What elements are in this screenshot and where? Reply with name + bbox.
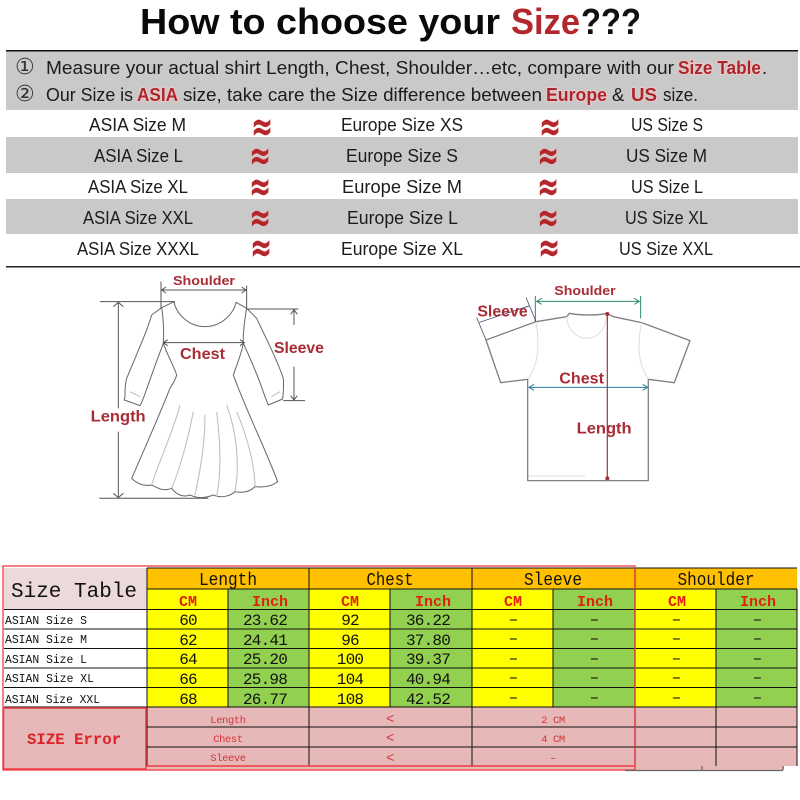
unit headers: Inch (577, 594, 613, 611)
measurements row M: – (509, 630, 518, 648)
conversion row XXXL: Europe Size XL (341, 238, 463, 259)
conversion row XXL: US Size XL (625, 207, 708, 228)
measurements row XXL: 108 (337, 691, 363, 709)
conversion row XL: ASIA Size XL (88, 176, 188, 197)
unit headers: CM (341, 594, 359, 611)
instruction 2: ② (15, 82, 35, 107)
instruction 2: Europe (546, 84, 607, 105)
measurements row L: – (672, 650, 681, 668)
measurements row M: 96 (341, 632, 359, 650)
size error rows: < (386, 712, 394, 728)
size labels: ASIAN Size XL (5, 672, 94, 686)
table grid (4, 568, 797, 766)
conversion row M: ≈ (539, 104, 561, 150)
measurements row M: 24.41 (243, 632, 287, 650)
conversion row XL: ≈ (249, 164, 271, 210)
measurements row M: – (753, 630, 762, 648)
instruction 2: size, take care the Size difference between (183, 84, 542, 105)
unit headers: Inch (252, 594, 288, 611)
size labels: ASIAN Size XXL (5, 693, 100, 707)
unit headers (179, 594, 776, 611)
conversion row XXL: Europe Size L (347, 207, 458, 228)
instruction 1: . (762, 57, 767, 78)
measurements row M: 62 (179, 632, 197, 650)
conversion row M: Europe Size XS (341, 114, 463, 135)
instruction 1: ① (15, 55, 35, 80)
heading: size table: Size Table (11, 581, 137, 604)
measurements row L: 100 (337, 651, 363, 669)
measurements row S: 60 (179, 612, 197, 630)
unit headers: Inch (415, 594, 451, 611)
measurements row XL (179, 669, 762, 689)
measurements row XXL (179, 689, 762, 709)
size error rows: 2 CM (541, 715, 565, 727)
dress label: shoulder: Shoulder (173, 274, 235, 288)
size error rows: < (386, 751, 394, 767)
conversion row XL (88, 164, 703, 210)
measurements row XXL: – (509, 689, 518, 707)
instruction 2: & (612, 84, 625, 105)
t-shirt sleeve marker (477, 297, 536, 340)
measurements row XXL: 42.52 (406, 691, 450, 709)
column headers: Sleeve (524, 571, 582, 591)
unit headers: CM (668, 594, 686, 611)
table cell fills (4, 568, 797, 770)
conversion row XXXL: ≈ (538, 225, 560, 271)
measurements row S: – (590, 611, 599, 629)
conversion row M: ASIA Size M (89, 114, 186, 135)
icon: t-shirt outline (486, 313, 690, 481)
measurements row S: – (672, 611, 681, 629)
instruction 1: Measure your actual shirt Length, Chest, Shoulder…etc, compare with our (46, 57, 674, 78)
unit headers: CM (504, 594, 522, 611)
conversion row XXXL (77, 225, 713, 271)
conversion row L (94, 133, 707, 179)
size error rows: < (386, 731, 394, 747)
measurements row S (179, 611, 762, 630)
instruction 1: Size Table (678, 57, 761, 78)
t-shirt label: shoulder: Shoulder (554, 284, 616, 298)
size error rows: Chest (213, 734, 243, 746)
measurements row XXL: 26.77 (243, 691, 287, 709)
measurements row S: – (753, 611, 762, 629)
dress label: length: Length (91, 409, 146, 426)
conversion row XL: US Size L (631, 176, 703, 197)
title: Size (511, 1, 580, 42)
column headers: Chest (366, 571, 414, 591)
conversion row L: ≈ (249, 133, 271, 179)
conversion row XXL: ASIA Size XXL (83, 207, 193, 228)
diagram: dress measurements (91, 274, 324, 498)
measurements row M: – (672, 630, 681, 648)
measurements row XL: 40.94 (406, 671, 450, 689)
measurements row S: – (509, 611, 518, 629)
title (140, 1, 641, 42)
size error rows: Sleeve (210, 753, 246, 765)
measurements row L: – (509, 650, 518, 668)
icon: dress outline (124, 302, 284, 497)
size error rows: 4 CM (541, 734, 565, 746)
instruction 2: US (631, 84, 657, 105)
t-shirt label: length: Length (577, 420, 632, 437)
measurements row XXL: 68 (179, 691, 197, 709)
measurements row S: 36.22 (406, 612, 450, 630)
size labels: ASIAN Size S (5, 614, 87, 628)
column headers: Length (199, 571, 257, 591)
size error rows: Length (210, 715, 246, 727)
measurements row M (179, 630, 762, 650)
size error rows: – (550, 753, 556, 765)
conversion row M: US Size S (631, 114, 703, 135)
column headers (199, 571, 754, 591)
measurements row L: 64 (179, 651, 197, 669)
dress fold lines (130, 392, 280, 497)
conversion row XXL: ≈ (537, 195, 559, 241)
conversion row L: ≈ (537, 133, 559, 179)
conversion row L: US Size M (626, 145, 707, 166)
panel: instructions (6, 50, 798, 110)
size labels (5, 614, 100, 707)
conversion row XL: Europe Size M (342, 176, 462, 197)
size error rows (210, 712, 565, 767)
measurements row XXL: – (753, 689, 762, 707)
instruction 2: Our Size is (46, 84, 133, 105)
diagram: t-shirt measurements (477, 284, 690, 481)
t-shirt label: sleeve: Sleeve (477, 304, 528, 321)
measurements row M: 37.80 (406, 632, 450, 650)
measurements row XL: 66 (179, 671, 197, 689)
red highlight frames (3, 566, 635, 770)
size labels: ASIAN Size L (5, 653, 87, 667)
instruction 1 (15, 55, 767, 80)
measurements row L: – (590, 650, 599, 668)
dress label: sleeve: Sleeve (274, 340, 324, 357)
t-shirt shoulder arrow (535, 296, 641, 322)
conversion row XXL (83, 195, 708, 241)
conversion row XXL: ≈ (249, 195, 271, 241)
dress label: chest: Chest (180, 346, 226, 363)
size error label: SIZE Error (27, 731, 121, 749)
conversion row XXXL: ASIA Size XXXL (77, 238, 199, 259)
title: How to choose your (140, 1, 500, 42)
measurements row S: 23.62 (243, 612, 287, 630)
instruction 2: size. (663, 84, 698, 105)
measurements row XL: – (672, 669, 681, 687)
instruction 2 (15, 82, 698, 107)
title: ??? (581, 1, 641, 42)
measurements row XXL: – (672, 689, 681, 707)
unit headers: Inch (740, 594, 776, 611)
measurements row L: – (753, 650, 762, 668)
size labels: ASIAN Size M (5, 633, 87, 647)
measurements row XXL: – (590, 689, 599, 707)
measurements row XL: – (590, 669, 599, 687)
conversion row L: ASIA Size L (94, 145, 183, 166)
measurements row XL: 104 (337, 671, 363, 689)
t-shirt chest arrow (529, 384, 648, 390)
measurements row L (179, 650, 762, 669)
column headers: Shoulder (678, 571, 754, 591)
measurements row L: 39.37 (406, 651, 450, 669)
measurements row M: – (590, 630, 599, 648)
panel: size conversion table (6, 104, 800, 271)
measurements row XL: – (753, 669, 762, 687)
dress measurement lines (99, 282, 305, 498)
panel: size table (3, 566, 797, 770)
table bottom marks (625, 766, 783, 770)
measurements row S: 92 (341, 612, 359, 630)
measurements row XL: – (509, 669, 518, 687)
measurements row XL: 25.98 (243, 671, 287, 689)
t-shirt length arrow (605, 312, 609, 480)
conversion row M (89, 104, 703, 150)
conversion row XL: ≈ (537, 164, 559, 210)
unit headers: CM (179, 594, 197, 611)
t-shirt seams (528, 315, 648, 476)
instruction 2: ASIA (137, 84, 178, 105)
measurements row L: 25.20 (243, 651, 287, 669)
conversion row L: Europe Size S (346, 145, 458, 166)
t-shirt label: chest: Chest (559, 370, 605, 387)
conversion row M: ≈ (251, 104, 273, 150)
conversion row XXXL: ≈ (250, 225, 272, 271)
conversion row XXXL: US Size XXL (619, 238, 713, 259)
